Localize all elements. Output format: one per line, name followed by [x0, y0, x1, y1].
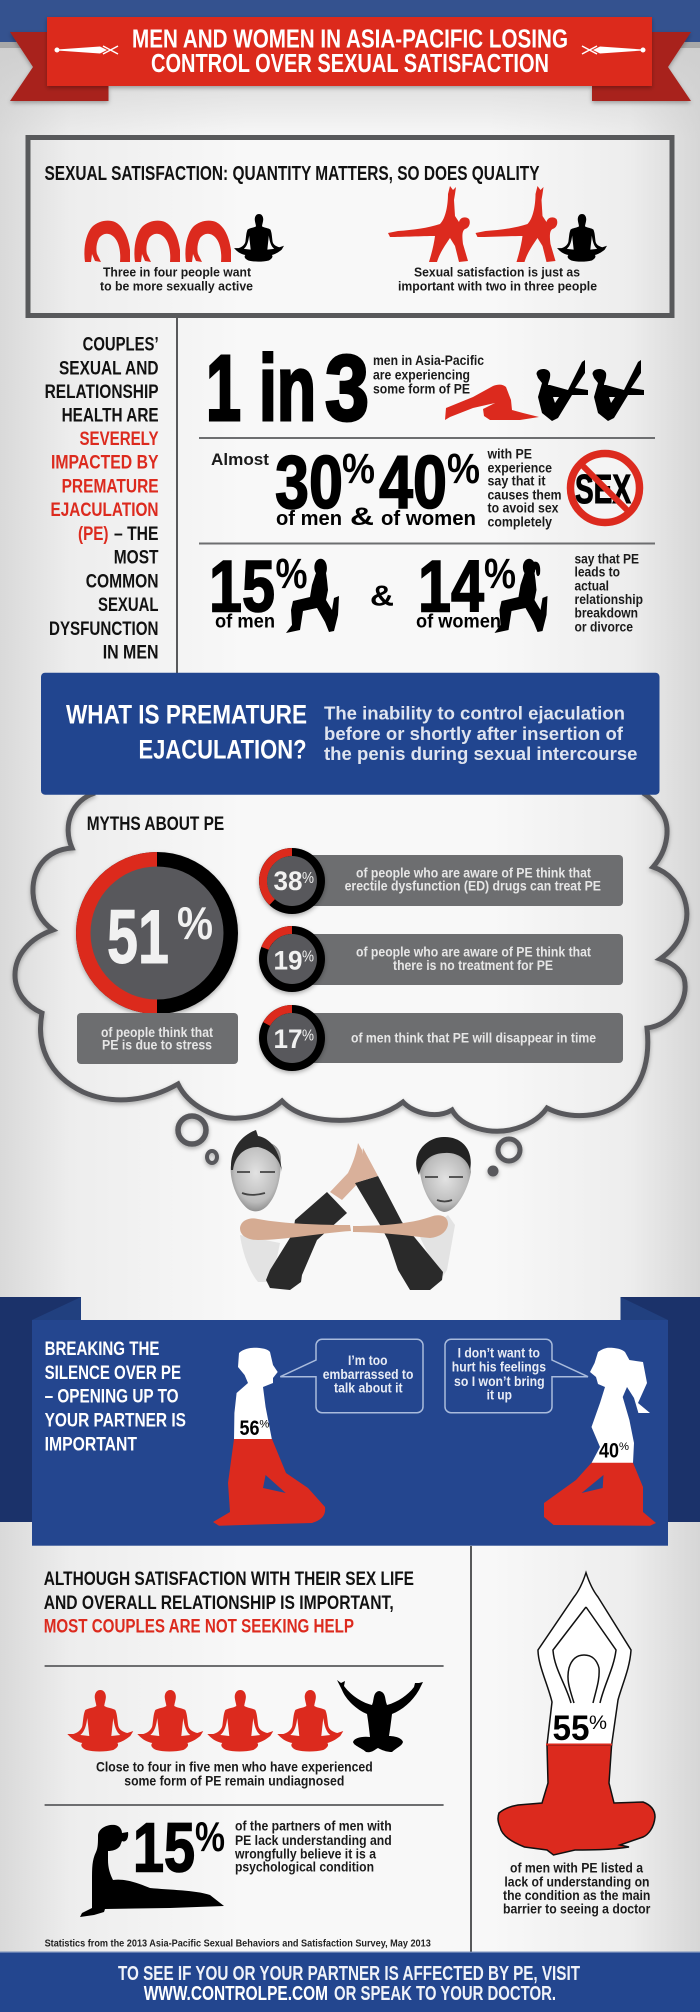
callout: hurt his feelings: so I won’t bring: [454, 1373, 545, 1389]
stat: 30% and 40%: Almost: [211, 451, 270, 469]
title: MEN AND WOMEN IN ASIA-PACIFIC LOSING: [132, 26, 568, 54]
heading: IMPORTANT: [45, 1434, 137, 1456]
heading: [45, 1338, 186, 1456]
text: say that PE: say that PE: [574, 551, 639, 566]
definition panel: [41, 673, 660, 795]
text: with PE experience: causes them: [488, 487, 562, 502]
header band: [0, 0, 700, 48]
heading: what is PE: EJACULATION?: [138, 734, 306, 764]
icon: no sex sign: [570, 454, 640, 522]
myth: 19 percent: [259, 926, 623, 992]
chart: 17 percent ring: [259, 1005, 325, 1071]
icons: three in four: [84, 214, 284, 262]
stat: 30% and 40%: of women: [381, 508, 476, 530]
left column statement: MOST: [114, 547, 159, 569]
stat: 1 in 3: in: [259, 336, 316, 440]
text: say that PE: or divorce: [574, 620, 633, 635]
column divider: [176, 318, 178, 673]
callout: embarrassed: talk about it: [334, 1380, 403, 1396]
chart: 38 percent ring: [259, 848, 325, 914]
left column statement: PREMATURE: [62, 475, 159, 497]
stat: 15 percent partners: 15: [133, 1809, 195, 1887]
text: with PE experience: [487, 446, 562, 530]
caption: four in five: [96, 1760, 373, 1789]
left column statement: HEALTH ARE: [62, 405, 159, 427]
stat: 30% and 40%: %: [447, 445, 480, 493]
arm and head outline: [553, 1607, 616, 1703]
icon: kneeling woman: [494, 559, 548, 633]
stat: 15% and 14%: of women: [416, 610, 501, 632]
photo: couple in yoga pose: [231, 1130, 471, 1290]
left column statement: DYSFUNCTION: [49, 618, 158, 640]
callout: embarrassed: [280, 1339, 423, 1413]
text: partners: PE lack understanding and: [235, 1833, 392, 1848]
text: with PE experience: to avoid sex: [488, 501, 559, 516]
stat: 15 percent partners: [133, 1809, 392, 1887]
thought cloud: [15, 793, 687, 1131]
text: say that PE: breakdown: [574, 606, 638, 621]
footer call to action: WWW.CONTROLPE.COM: [144, 1982, 328, 2005]
text: partners: psychological condition: [235, 1860, 374, 1875]
stat: 15% and 14%: 15: [209, 547, 275, 628]
myth: 17 percent: of men think that PE will disappear in time: [351, 1031, 596, 1046]
chart: 51 percent donut: %: [177, 897, 213, 949]
figure: 55 percent seated pose: [498, 1573, 655, 1855]
row divider: [199, 542, 655, 544]
chart: 38 percent ring: %: [302, 870, 314, 887]
icon: kneeling man: [286, 559, 339, 633]
chart: 51 percent donut: 51: [107, 895, 169, 980]
left column statement: (PE): [78, 523, 108, 545]
myth: 38 percent: of people who are aware of PE think that: [356, 866, 591, 881]
chart: 19 percent ring: [259, 926, 325, 992]
text: partners: [234, 1819, 392, 1875]
heading: SEXUAL SATISFACTION: QUANTITY MATTERS, SO DOES QUALITY: [44, 162, 540, 185]
woman: [353, 1137, 471, 1290]
icons: black boat poses: [536, 360, 644, 421]
text: say that PE: [574, 551, 643, 635]
figure: woman 40 percent: %: [619, 1441, 629, 1453]
stat: 30% and 40%: 30: [275, 440, 343, 524]
callout: hurt his feelings: it up: [487, 1386, 512, 1402]
left column statement: EJACULATION: [50, 499, 158, 521]
heading: most couples not seeking help: ALTHOUGH SATISFACTION WITH THEIR SEX LIFE: [44, 1569, 414, 1590]
left column statement: IN MEN: [103, 642, 158, 664]
stat: 30% and 40%: &: [350, 503, 374, 531]
row divider: [45, 1804, 444, 1806]
title banner: [10, 17, 691, 101]
heading: most couples not seeking help: AND OVERALL RELATIONSHIP IS IMPORTANT,: [44, 1593, 394, 1614]
stat: 15% and 14%: of men: [215, 610, 275, 632]
text: men in Asia-Pacific: men in Asia-Pacific: [373, 353, 484, 368]
myth: 19 percent: of people who are aware of PE think that: [356, 945, 591, 960]
heading: myths: MYTHS ABOUT PE: [87, 813, 224, 835]
callout: hurt his feelings: I don’t want to: [458, 1345, 540, 1361]
caption: 55 percent: the condition as the main: [503, 1888, 650, 1903]
stat: 15% and 14%: &: [370, 581, 394, 613]
stat: 30% and 40%: [211, 440, 640, 531]
heading: most couples not seeking help: [44, 1569, 414, 1638]
left column statement: COUPLES’: [83, 334, 159, 356]
chart: 38 percent ring: 38: [274, 866, 302, 896]
stat: 30% and 40%: 40: [379, 440, 447, 524]
footer call to action: OR SPEAK TO YOUR DOCTOR.: [334, 1982, 556, 2005]
caption: 55 percent: lack of understanding on: [504, 1875, 650, 1890]
chart: 19 percent ring: 19: [274, 945, 302, 975]
heading: YOUR PARTNER IS: [45, 1410, 186, 1432]
text: men in Asia-Pacific: [373, 353, 484, 396]
caption: four in five: some form of PE remain undiagnosed: [124, 1774, 344, 1789]
caption: 51 percent: [77, 1013, 238, 1064]
stat: 15% and 14%: [209, 547, 643, 635]
heading: what is PE: WHAT IS PREMATURE: [66, 699, 307, 729]
icon: left ornament: [55, 46, 118, 54]
left column statement: IMPACTED BY: [51, 452, 158, 474]
thought bubbles: [178, 1116, 520, 1176]
callout: embarrassed: embarrassed to: [323, 1366, 413, 1382]
text: men in Asia-Pacific: some form of PE: [373, 381, 470, 396]
left column statement: [45, 334, 159, 664]
stat: 30% and 40%: %: [342, 445, 375, 493]
stat: 1 in 3: [206, 336, 644, 440]
myth: 38 percent: [259, 848, 623, 914]
caption: three in four: [100, 265, 253, 294]
title: [132, 26, 568, 78]
chart: 19 percent ring: %: [302, 948, 314, 966]
left column statement: COMMON: [86, 570, 158, 592]
figure: man 56 percent: %: [259, 1418, 270, 1430]
stat: 30% and 40%: of men: [276, 508, 342, 530]
heading: SILENCE OVER PE: [45, 1362, 181, 1384]
icons: two in three: [388, 186, 607, 262]
text: say that PE: leads to: [574, 565, 620, 580]
chart: 51 percent donut: [76, 852, 238, 1014]
stat: 1 in 3: 3: [325, 336, 369, 440]
figure: man 56 percent: [213, 1348, 325, 1526]
caption: 55 percent: of men with PE listed a: [510, 1861, 643, 1876]
heading: most couples not seeking help: MOST COUPLES ARE NOT SEEKING HELP: [44, 1617, 354, 1638]
text: with PE experience: experience: [488, 460, 552, 475]
figure: woman 40 percent: [544, 1348, 656, 1526]
footer call to action: [0, 1952, 700, 2012]
heading: what is PE: [66, 699, 307, 764]
myth: 19 percent: there is no treatment for PE: [393, 958, 553, 973]
left column statement: RELATIONSHIP: [45, 381, 159, 403]
myth: 17 percent: [259, 1005, 623, 1071]
definition text: [324, 702, 638, 764]
chart: 17 percent ring: 17: [274, 1024, 302, 1054]
figure: 55 percent seated pose: 55: [552, 1709, 590, 1748]
stat: 15% and 14%: %: [276, 550, 308, 598]
caption: three in four: Three in four people want: [103, 265, 252, 280]
caption: 55 percent: [503, 1861, 651, 1916]
myth: 38 percent: erectile dysfunction (ED) drugs can treat PE: [345, 879, 601, 894]
panel: quantity and quality: [28, 138, 672, 316]
icon: red plow pose: [445, 385, 539, 420]
stat: 15% and 14%: 14: [418, 547, 484, 628]
heading: – OPENING UP TO: [45, 1386, 179, 1408]
stat: 15 percent partners: %: [195, 1813, 225, 1860]
column divider: [470, 1546, 472, 1952]
caption: 55 percent: barrier to seeing a doctor: [503, 1901, 651, 1916]
callout: hurt his feelings: [445, 1339, 588, 1413]
icons: four in five: [67, 1680, 423, 1752]
left column statement: – THE: [114, 523, 158, 545]
figure: woman 40 percent: 40: [599, 1440, 619, 1463]
caption: three in four: to be more sexually active: [100, 279, 253, 294]
text: partners: wrongfully believe it is a: [234, 1846, 376, 1861]
text: partners: of the partners of men with: [235, 1819, 392, 1834]
callout: hurt his feelings: hurt his feelings: [452, 1359, 546, 1375]
caption: 51 percent: PE is due to stress: [102, 1038, 212, 1052]
caption: two in three: [398, 265, 597, 294]
caption: two in three: Sexual satisfaction is just as: [414, 265, 580, 280]
text: men in Asia-Pacific: are experiencing: [373, 368, 470, 382]
definition text: the penis during sexual intercourse: [324, 743, 638, 764]
icon: no sex sign: SEX: [575, 466, 631, 512]
row divider: [199, 437, 655, 439]
text: say that PE: relationship: [574, 592, 643, 607]
definition text: The inability to control ejaculation: [324, 702, 625, 723]
icon: right ornament: [582, 46, 645, 54]
text: with PE experience: say that it: [488, 474, 546, 489]
caption: two in three: important with two in three people: [398, 279, 597, 294]
left column statement: SEVERELY: [80, 428, 158, 450]
caption: 51 percent: of people think that: [101, 1025, 213, 1040]
chart: 17 percent ring: %: [302, 1028, 314, 1044]
text: with PE experience: completely: [488, 515, 552, 530]
heading: BREAKING THE: [45, 1338, 159, 1360]
text: with PE experience: with PE: [487, 446, 532, 461]
stat: 15% and 14%: %: [484, 550, 516, 598]
icon: cobra pose: [80, 1825, 224, 1917]
title: CONTROL OVER SEXUAL SATISFACTION: [151, 50, 549, 78]
row divider: [45, 1665, 444, 1667]
caption: four in five: Close to four in five men who have experienced: [96, 1760, 373, 1775]
panel: breaking the silence: [0, 1297, 700, 1546]
figure: 55 percent seated pose: %: [589, 1713, 607, 1734]
definition text: before or shortly after insertion of: [324, 723, 624, 744]
text: say that PE: actual: [574, 579, 609, 594]
figure: man 56 percent: 56: [240, 1417, 260, 1440]
stat: 1 in 3: 1: [206, 336, 241, 440]
source note: Statistics from the 2013 Asia-Pacific Sexual Behaviors and Satisfaction Survey, May 2013: [45, 1939, 431, 1950]
callout: embarrassed: I’m too: [348, 1352, 388, 1368]
left column statement: SEXUAL AND: [59, 357, 158, 379]
man: [231, 1130, 363, 1290]
left column statement: SEXUAL: [98, 594, 159, 616]
